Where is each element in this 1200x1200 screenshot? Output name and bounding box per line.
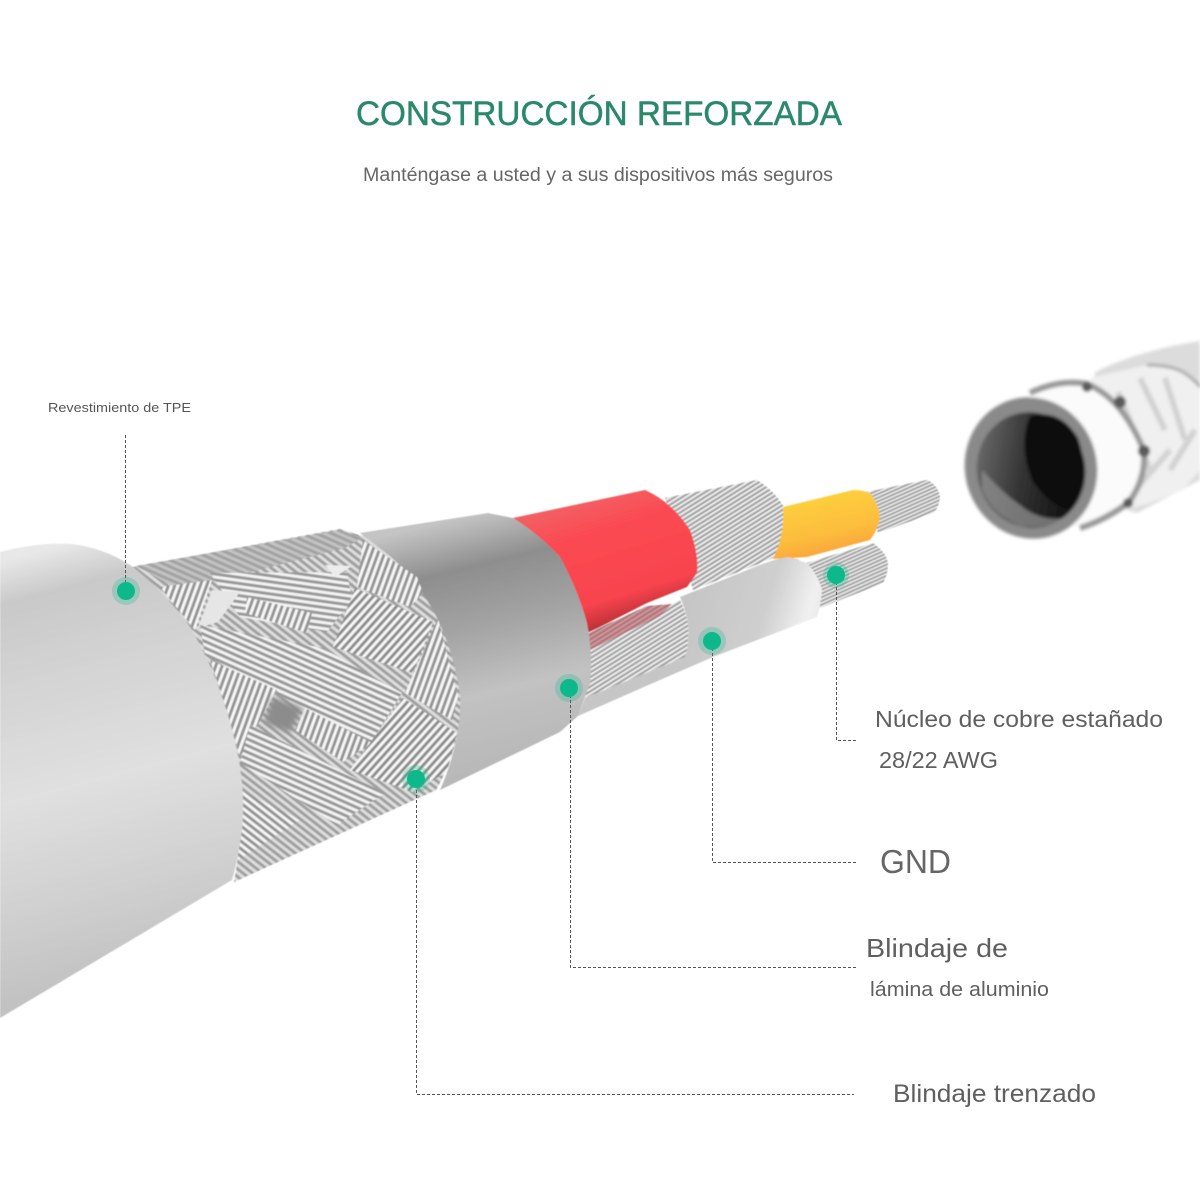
lower tinned strands bbox=[800, 543, 888, 608]
leader line bbox=[570, 695, 856, 968]
braided shield bbox=[133, 529, 460, 882]
marker bbox=[112, 577, 140, 605]
orange reflection bbox=[688, 557, 800, 600]
leader line bbox=[416, 785, 854, 1094]
label bbox=[875, 706, 1163, 773]
braid texture bbox=[1118, 378, 1195, 490]
highlights bbox=[198, 590, 240, 628]
red insulated wire bbox=[480, 490, 697, 640]
callout: tinned copper core bbox=[823, 562, 1163, 773]
braid base bbox=[133, 529, 460, 882]
leader line bbox=[836, 582, 856, 740]
front rim bbox=[949, 382, 1113, 554]
lighter cavity floor bbox=[982, 470, 1066, 527]
subtitle: Manténgase a usted y a sus dispositivos más seguros bbox=[363, 165, 833, 186]
dark interior bbox=[1024, 414, 1083, 510]
leader line bbox=[712, 648, 856, 862]
upper copper strands bbox=[665, 480, 788, 590]
strands under red wire bbox=[585, 600, 688, 698]
inner copper core tip bbox=[866, 480, 940, 533]
outer sleeve bbox=[1090, 341, 1200, 513]
label: Blindaje trenzado bbox=[893, 1080, 1096, 1108]
foil ring bbox=[1030, 383, 1144, 528]
label bbox=[866, 933, 1049, 1001]
callout: GND bbox=[698, 627, 951, 880]
label: Núcleo de cobre estañado bbox=[875, 706, 1163, 732]
label: Blindaje de bbox=[866, 933, 1008, 963]
label: 28/22 AWG bbox=[879, 747, 998, 773]
label: GND bbox=[880, 843, 951, 880]
yellow insulated wire bbox=[773, 490, 880, 559]
label: Revestimiento de TPE bbox=[48, 400, 191, 415]
white insulated wire bbox=[578, 557, 822, 716]
illustration: cut-away cable bbox=[0, 480, 940, 1018]
illustration: cable end on the right bbox=[949, 341, 1200, 554]
title: CONSTRUCCIÓN REFORZADA bbox=[356, 95, 842, 133]
inner cavity bbox=[964, 400, 1098, 540]
marker bbox=[698, 627, 726, 655]
ring studs bbox=[1082, 382, 1150, 508]
leader line bbox=[124, 435, 126, 582]
dark braid edge bbox=[1147, 365, 1200, 387]
outer TPE jacket bbox=[0, 544, 243, 1018]
marker bbox=[402, 765, 430, 793]
dark recess bbox=[264, 697, 303, 733]
aluminium foil shield bbox=[360, 513, 591, 790]
label: lámina de aluminio bbox=[870, 979, 1049, 1001]
callout: aluminium foil shield bbox=[555, 674, 1049, 1001]
red tint on strands bbox=[587, 604, 672, 650]
braid section of sleeve bbox=[1090, 365, 1200, 510]
marker bbox=[555, 674, 583, 702]
callout: TPE jacket bbox=[48, 400, 191, 605]
callout: braided shield bbox=[402, 765, 1096, 1108]
marker bbox=[823, 562, 849, 588]
white tube bbox=[1030, 384, 1144, 528]
